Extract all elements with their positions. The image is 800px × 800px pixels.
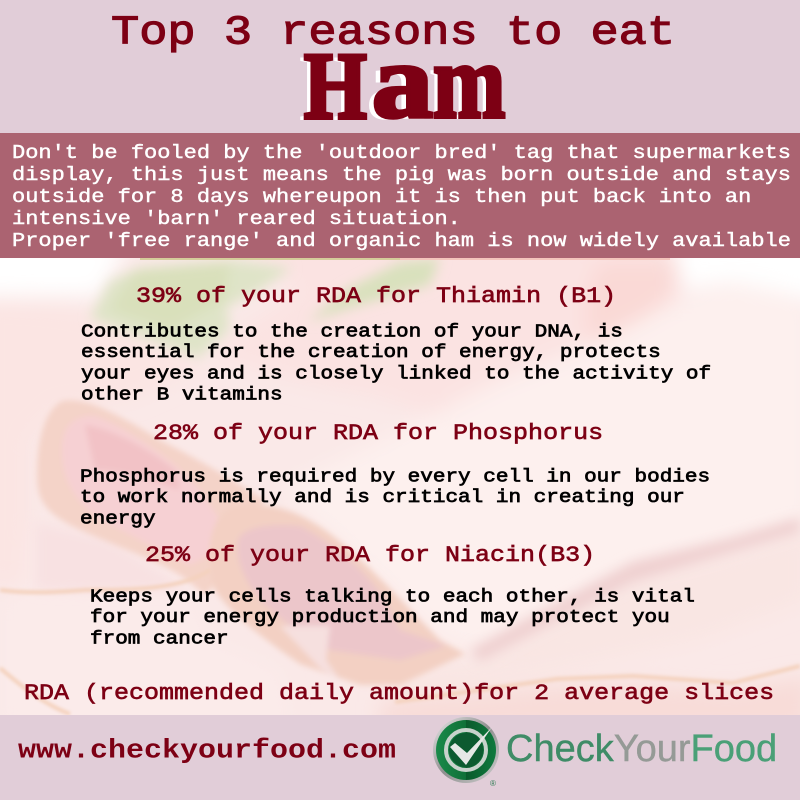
- intro text: Don't be fooled by the 'outdoor bred' tag that supermarkets display, this just means the pig was born outside and stays outside for 8 days whereupon it is then put back into an intensive 'barn' reared situation. Proper 'free range' and organic ham is now widely available: [12, 142, 791, 252]
- title word: Ham: H: [304, 33, 367, 139]
- heading: thiamin: 39% of your RDA for Thiamin (B1): [136, 283, 616, 309]
- top header panel: [0, 0, 800, 133]
- title: Top 3 reasons to eat: [111, 10, 675, 57]
- text: niacin: Keeps your cells talking to each other, is vital for your energy production and may protect you from cancer: [90, 587, 695, 650]
- ham fold one: [37, 400, 265, 595]
- text: phosphorus: Phosphorus is required by every cell in our bodies to work normally and is critical in creating our energy: [80, 467, 710, 530]
- footer panel: [0, 715, 800, 800]
- shadow under upper slice: [35, 518, 800, 662]
- footnote: RDA (recommended daily amount)for 2 average slices: [24, 680, 774, 706]
- title word: Ham: a: [372, 23, 433, 140]
- title word: Ham: [300, 23, 506, 140]
- website url: www.checkyourfood.com: [18, 736, 396, 766]
- heading: niacin: 25% of your RDA for Niacin(B3): [145, 542, 595, 568]
- top edge of photo: [140, 258, 400, 260]
- title word: Ham: m: [433, 23, 505, 140]
- icon: check logo: ®: [490, 779, 496, 788]
- ham rind bands: [0, 570, 800, 714]
- logo wordmark: CheckYourFood: [506, 728, 777, 770]
- heading: phosphorus: 28% of your RDA for Phosphorus: [153, 420, 603, 446]
- intro panel: [0, 133, 800, 258]
- icon: check logo: [433, 717, 499, 788]
- text: thiamin: Contributes to the creation of your DNA, is essential for the creation of energy, protects your eyes and is closely linked to the activity of other B vitamins: [81, 322, 711, 406]
- leaf: [90, 258, 440, 358]
- background: ham slices photo: [0, 258, 800, 715]
- ham fold two: [210, 504, 465, 685]
